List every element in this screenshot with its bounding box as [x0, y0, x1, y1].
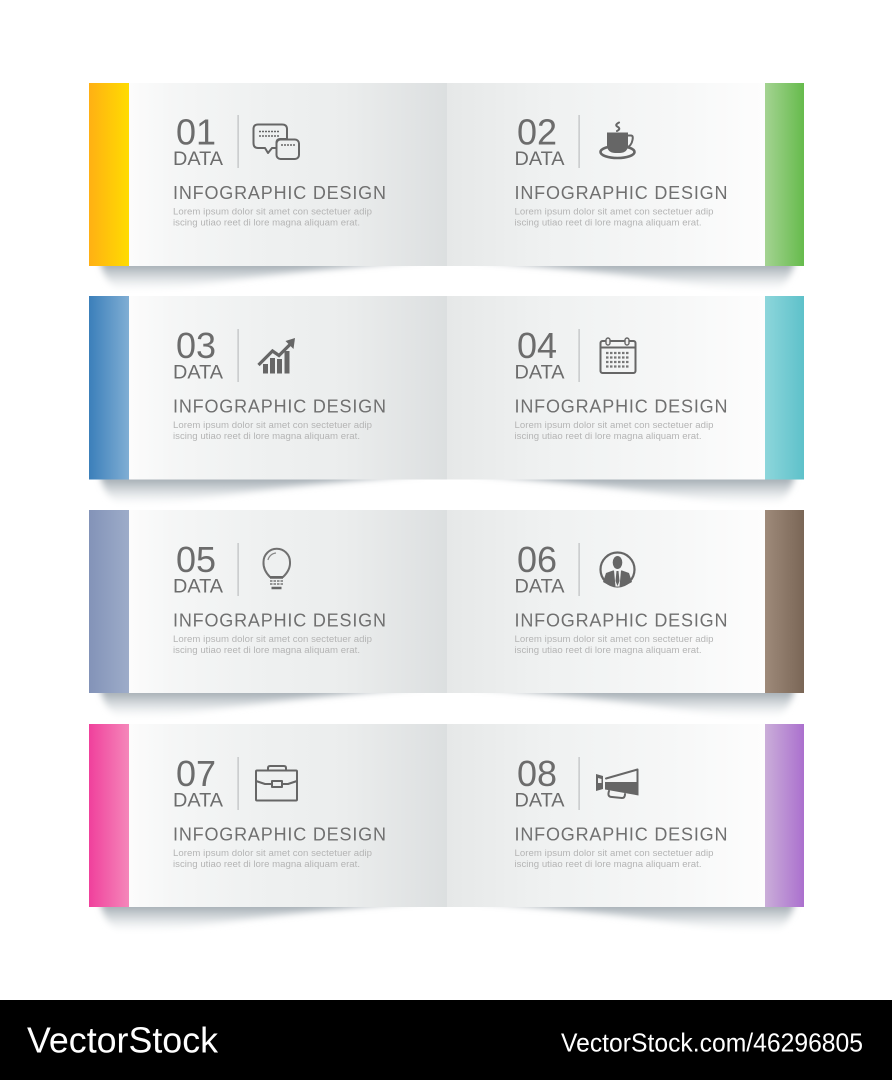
heading 04: INFOGRAPHIC DESIGN [514, 396, 728, 416]
panel 04 [447, 296, 765, 480]
panel 08 [447, 724, 765, 907]
number 01: 01 [176, 112, 216, 152]
heading 02: INFOGRAPHIC DESIGN [514, 183, 728, 203]
icon: coffee cup [600, 122, 634, 158]
number 05: 05 [176, 539, 216, 580]
icon: growth chart [258, 338, 295, 374]
body text 06: Lorem ipsum dolor sit amet con sectetuer adip [514, 634, 714, 645]
card 07 [89, 724, 447, 930]
color tab 01 [89, 83, 129, 266]
label 02: DATA [514, 148, 564, 170]
color tab 06 [765, 510, 804, 693]
number 03: 03 [176, 325, 216, 366]
body text 07: Lorem ipsum dolor sit amet con sectetuer adip [173, 848, 372, 859]
card 01 [89, 83, 447, 289]
heading 06: INFOGRAPHIC DESIGN [514, 610, 728, 630]
body text 03: Lorem ipsum dolor sit amet con sectetuer adip [173, 420, 372, 431]
body text 02: Lorem ipsum dolor sit amet con sectetuer adip [514, 206, 714, 218]
shadow 06 [470, 687, 795, 716]
icon: light bulb [263, 549, 290, 588]
body text 03: iscing utiao reet di lore magna aliquam erat. [173, 431, 360, 442]
shadow 02 [470, 260, 795, 289]
card 02 [447, 83, 804, 289]
body text 05: Lorem ipsum dolor sit amet con sectetuer adip [173, 634, 372, 645]
shadow 08 [470, 901, 795, 930]
number 08: 08 [517, 753, 557, 794]
body text 05: iscing utiao reet di lore magna aliquam erat. [173, 645, 360, 656]
body text 04: Lorem ipsum dolor sit amet con sectetuer adip [514, 420, 714, 431]
body text 01: Lorem ipsum dolor sit amet con sectetuer adip [173, 206, 372, 218]
shadow 01 [100, 260, 425, 289]
shadow 03 [100, 474, 425, 503]
color tab 02 [765, 83, 804, 266]
heading 03: INFOGRAPHIC DESIGN [173, 396, 386, 416]
panel 07 [129, 724, 447, 907]
color tab 08 [765, 724, 804, 907]
card 05 [89, 510, 447, 716]
heading 05: INFOGRAPHIC DESIGN [173, 610, 386, 630]
color tab 03 [89, 296, 129, 480]
brand name: VectorStock [27, 1020, 219, 1060]
color tab 07 [89, 724, 129, 907]
panel 01 [129, 83, 447, 266]
number 04: 04 [517, 325, 557, 366]
icon: briefcase [256, 766, 297, 800]
label 06: DATA [514, 576, 564, 598]
shadow 05 [100, 687, 425, 716]
shadow 04 [470, 474, 795, 503]
label 03: DATA [173, 362, 223, 384]
heading 08: INFOGRAPHIC DESIGN [514, 824, 728, 844]
panel 03 [129, 296, 447, 480]
heading 01: INFOGRAPHIC DESIGN [173, 183, 386, 203]
body text 08: Lorem ipsum dolor sit amet con sectetuer adip [514, 848, 714, 859]
panel 06 [447, 510, 765, 693]
heading 07: INFOGRAPHIC DESIGN [173, 824, 386, 844]
image reference: VectorStock.com/46296805 [561, 1028, 863, 1058]
number 02: 02 [517, 112, 557, 152]
number 07: 07 [176, 753, 216, 794]
label 01: DATA [173, 148, 223, 170]
label 05: DATA [173, 576, 223, 598]
card 04 [447, 296, 804, 503]
card 06 [447, 510, 804, 716]
icon: businessman [600, 552, 634, 586]
shadow 07 [100, 901, 425, 930]
body text 04: iscing utiao reet di lore magna aliquam erat. [514, 431, 702, 442]
icon: calendar [600, 338, 636, 373]
color tab 05 [89, 510, 129, 693]
body text 07: iscing utiao reet di lore magna aliquam erat. [173, 859, 360, 870]
body text 06: iscing utiao reet di lore magna aliquam erat. [514, 645, 702, 656]
label 07: DATA [173, 790, 223, 812]
number 06: 06 [517, 539, 557, 580]
icon: chat bubbles [254, 124, 299, 159]
color tab 04 [765, 296, 804, 480]
body text 08: iscing utiao reet di lore magna aliquam erat. [514, 859, 702, 870]
footer bar [0, 1000, 892, 1080]
label 04: DATA [514, 362, 564, 384]
panel 05 [129, 510, 447, 693]
card 03 [89, 296, 447, 503]
card 08 [447, 724, 804, 930]
label 08: DATA [514, 790, 564, 812]
body text 02: iscing utiao reet di lore magna aliquam erat. [514, 218, 702, 228]
icon: megaphone [596, 770, 638, 798]
body text 01: iscing utiao reet di lore magna aliquam erat. [173, 218, 360, 228]
panel 02 [447, 83, 765, 266]
